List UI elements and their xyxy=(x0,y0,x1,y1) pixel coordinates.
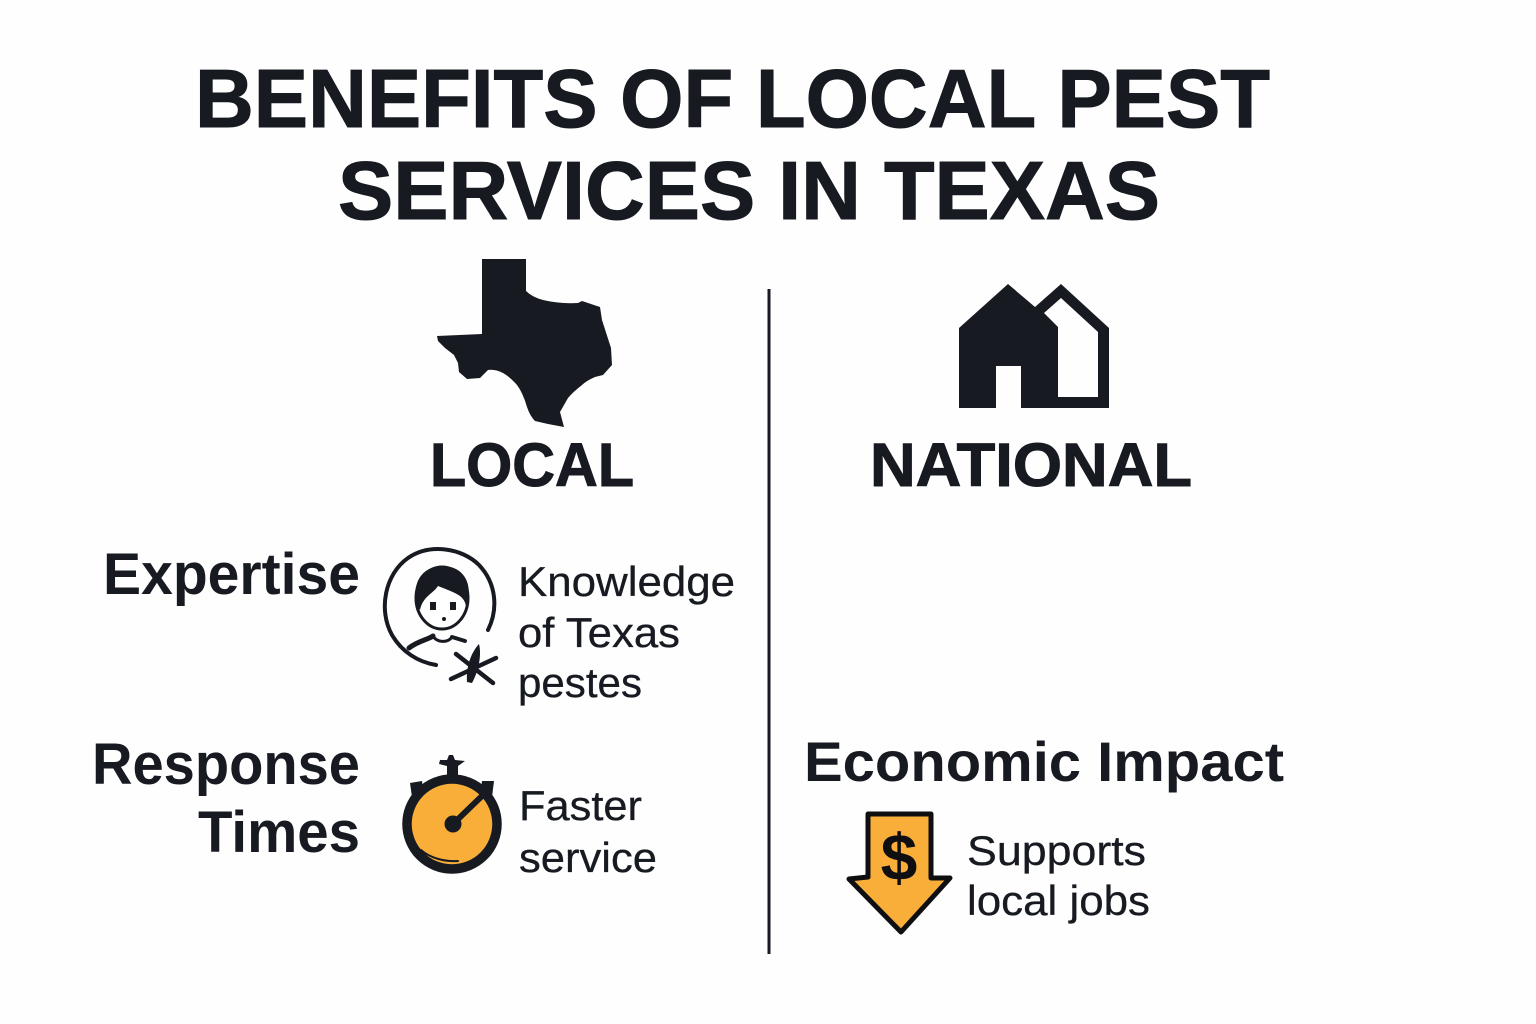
text: faster service: service xyxy=(519,834,657,881)
icon: houses xyxy=(959,284,1109,408)
heading: local: LOCAL xyxy=(430,431,634,499)
text: faster service: Faster xyxy=(519,782,642,829)
icon: Texas map xyxy=(437,259,612,427)
title: BENEFITS OF LOCAL PEST xyxy=(195,52,1270,145)
text: supports local jobs: Supports xyxy=(967,827,1146,874)
panel: national column xyxy=(804,284,1284,932)
text: knowledge of Texas pestes: pestes xyxy=(518,659,642,706)
text: knowledge of Texas pestes: Knowledge xyxy=(518,558,735,605)
text: supports local jobs: local jobs xyxy=(967,877,1150,924)
panel: local column xyxy=(92,259,735,881)
label: response times xyxy=(92,732,360,865)
icon: dollar down arrow xyxy=(849,814,950,932)
heading: national: NATIONAL xyxy=(870,431,1192,499)
text: knowledge of Texas pestes xyxy=(518,558,735,706)
label: expertise: Expertise xyxy=(103,542,360,607)
text: supports local jobs xyxy=(967,827,1150,924)
icon: dollar down arrow: $ xyxy=(881,820,917,894)
icon: person with pest xyxy=(385,549,496,683)
title xyxy=(195,52,1270,237)
label: economic impact: Economic Impact xyxy=(804,730,1284,793)
label: response times: Response xyxy=(92,732,360,797)
text: faster service xyxy=(519,782,657,881)
center divider line xyxy=(768,289,770,954)
text: knowledge of Texas pestes: of Texas xyxy=(518,609,680,656)
icon: stopwatch xyxy=(407,755,497,869)
title: SERVICES IN TEXAS xyxy=(338,144,1160,237)
label: response times: Times xyxy=(198,800,360,865)
